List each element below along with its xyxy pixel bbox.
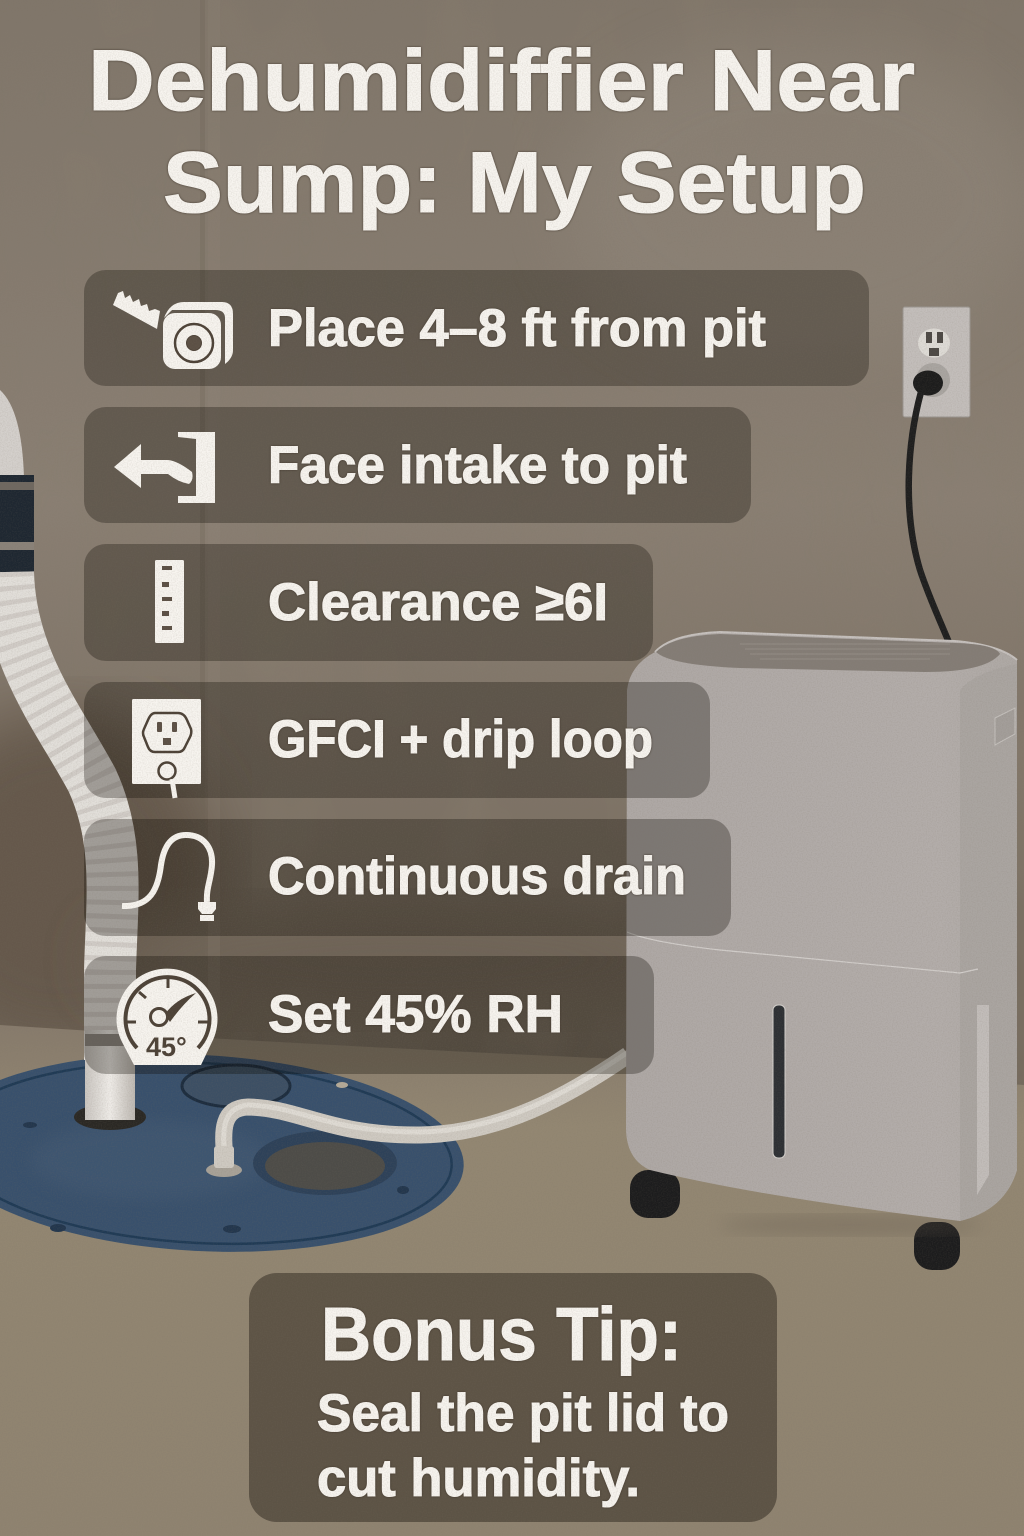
text: bonus tip body [317,1384,729,1508]
title: Dehumidiffier Near [88,33,915,129]
panel: clearance: Clearance ≥6I [268,573,608,632]
panel: continuous drain [84,819,731,936]
icon: humidity gauge: 45° [146,1032,187,1062]
top rim highlight [655,632,1017,660]
tank seam [627,932,978,973]
panel: GFCI [84,682,710,798]
icon: tape measure [113,291,233,369]
text: bonus tip body: cut humidity. [317,1449,640,1508]
icon: drain hose [122,835,216,921]
panel: clearance [84,544,653,661]
lid hatch ring [182,1065,290,1107]
side handle [995,708,1015,745]
icon: ruler [155,560,184,643]
panel: face intake: Face intake to pit [268,436,687,495]
panel: continuous drain: Continuous drain [268,847,686,906]
panel: bonus tip [249,1273,777,1522]
pit opening [253,1131,397,1195]
icon: humidity gauge [116,969,218,1065]
icon: GFCI outlet [132,699,201,798]
water level window [773,1005,785,1158]
lid bolts [23,1122,37,1128]
panel: GFCI: GFCI + drip loop [268,710,653,769]
sump pit lid [0,1041,469,1265]
basement floor [0,1025,1024,1536]
side face [960,664,1017,1221]
top control panel [656,634,1000,672]
caster wheels [630,1170,680,1218]
title: Sump: My Setup [163,135,866,231]
panel: place 4-8 ft: Place 4–8 ft from pit [268,299,766,358]
panel: face intake [84,407,751,523]
discharge pipe and corrugated hose [0,390,146,1130]
text: bonus tip body: Seal the pit lid to [317,1384,729,1443]
panel: set 45% RH: Set 45% RH [268,985,563,1044]
concrete wall background [0,0,1024,1110]
heading: bonus tip: Bonus Tip: [321,1292,682,1376]
side strip [977,1005,989,1195]
condensate drain hose [206,1052,628,1177]
pipe base flange [74,1104,146,1130]
dehumidifier [626,632,1017,1270]
panel: set 45% RH [84,956,654,1074]
power cord [909,392,950,645]
panel: place 4-8 ft [84,270,869,386]
title [88,33,915,231]
unit body [626,632,1017,1221]
icon: arrow to intake [114,432,215,503]
power outlet on the wall [903,307,970,645]
